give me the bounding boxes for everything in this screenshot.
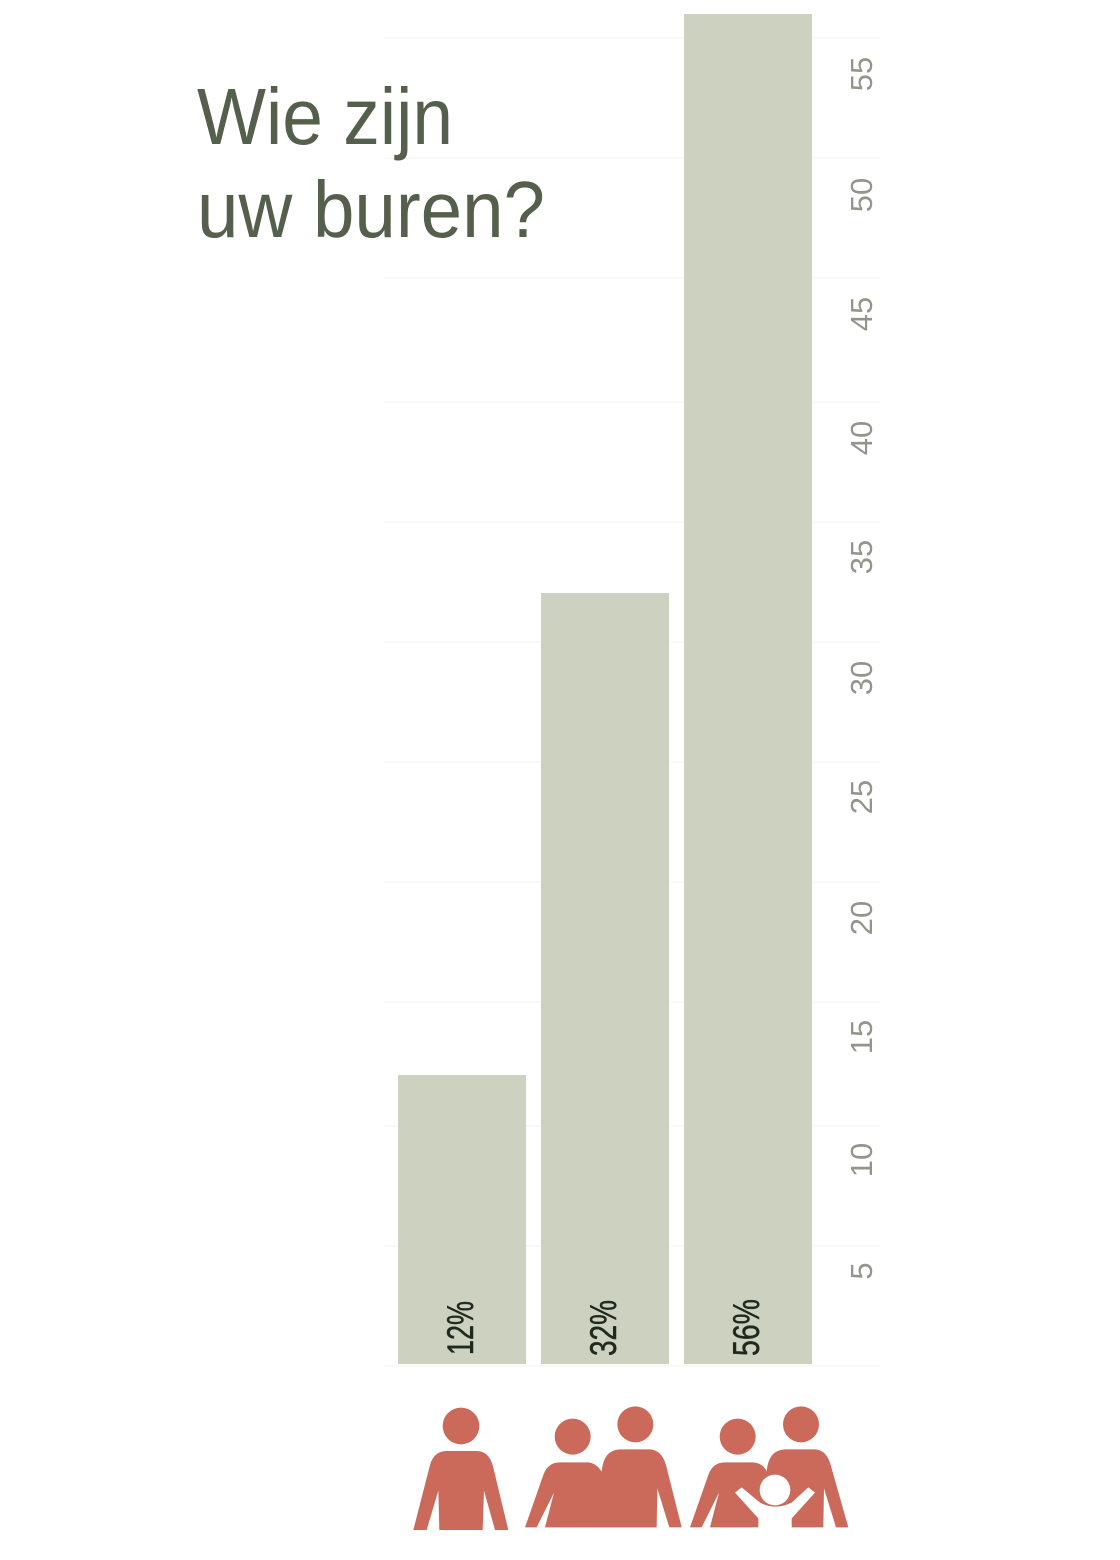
title: Wie zijn [197,72,453,161]
bar: 32% [541,593,669,1364]
y axis labels: 55 [844,57,879,91]
bar value labels [440,1299,767,1356]
icon: couple [525,1406,682,1527]
icon: couple with child [690,1406,848,1528]
icon: single person [413,1408,508,1530]
bars [398,14,812,1364]
y axis labels: 25 [844,780,879,814]
title [197,72,545,254]
y axis labels: 10 [844,1143,879,1177]
icons row [413,1406,848,1530]
bar: 12% [398,1075,526,1364]
bar value labels: 32% [583,1300,624,1356]
y axis labels: 30 [844,661,879,695]
y axis labels: 15 [844,1020,879,1054]
y axis labels: 45 [844,297,879,331]
bar value labels: 56% [726,1299,767,1356]
y axis labels: 50 [844,178,879,212]
y axis labels: 5 [844,1262,879,1280]
y axis labels: 35 [844,540,879,574]
y axis labels [844,57,879,1280]
bar: 56% [684,14,812,1364]
bar value labels: 12% [440,1301,481,1355]
title: uw buren? [197,165,545,254]
y axis labels: 40 [844,421,879,455]
y axis labels: 20 [844,901,879,935]
